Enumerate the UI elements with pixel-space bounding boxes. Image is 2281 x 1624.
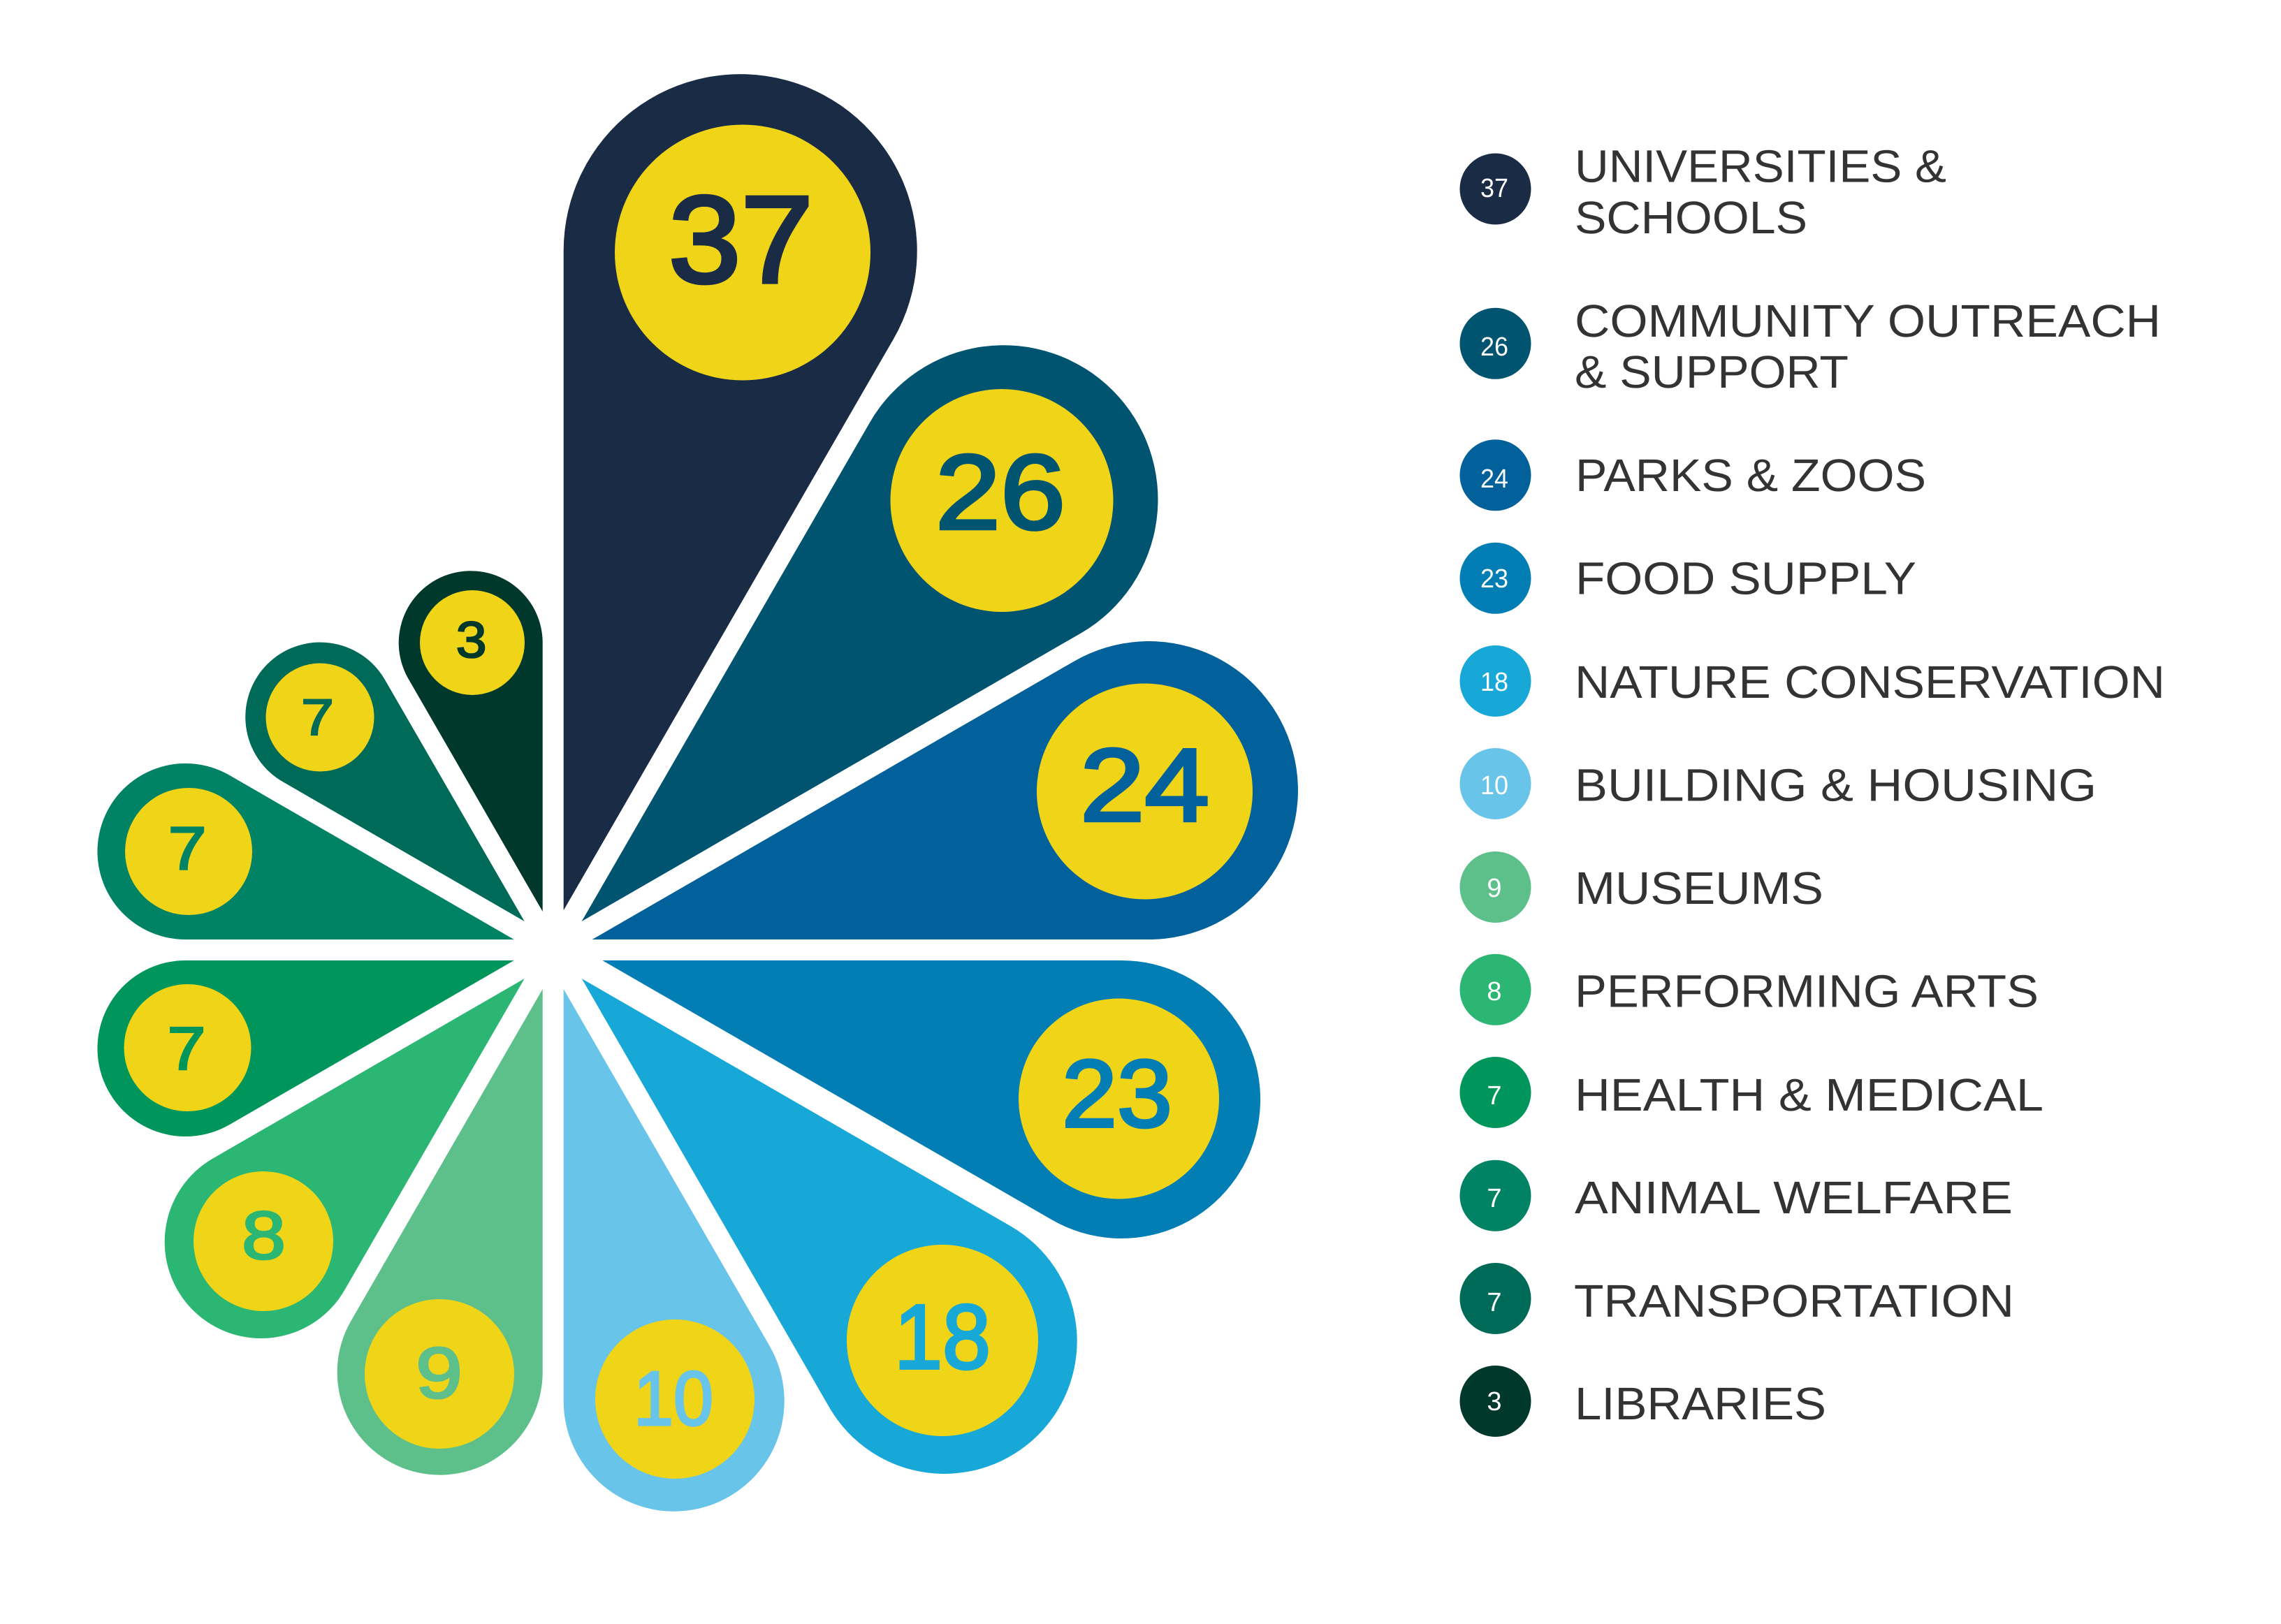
petal: building and housing 10: 10 (634, 1356, 713, 1442)
legend item: museums: MUSEUMS (1575, 863, 1823, 914)
petal: community outreach and support 26: 26 (935, 433, 1065, 552)
petal: parks and zoos 24 (592, 641, 1298, 939)
legend item: food supply: FOOD SUPPLY (1575, 553, 1916, 603)
petal: libraries 3 (399, 571, 543, 912)
legend item: universities and schools: SCHOOLS (1575, 192, 1807, 243)
flower chart (97, 74, 1298, 1512)
legend item: libraries (1460, 1366, 1826, 1437)
legend item: community outreach and support: & SUPPORT (1575, 346, 1849, 397)
legend item: museums: 9 (1487, 874, 1502, 903)
legend item: libraries: 3 (1487, 1387, 1502, 1417)
petal: universities and schools 37: 37 (669, 170, 813, 309)
petal: transportation 7: 7 (301, 689, 334, 746)
legend item: health and medical: HEALTH & MEDICAL (1575, 1069, 2043, 1120)
legend item: universities and schools: 37 (1480, 174, 1508, 203)
legend item: nature conservation: 18 (1480, 668, 1508, 697)
legend item: animal welfare: ANIMAL WELFARE (1575, 1172, 2013, 1223)
legend item: libraries: LIBRARIES (1575, 1378, 1826, 1429)
legend item: universities and schools (1460, 140, 1946, 243)
petal: health and medical 7: 7 (168, 1015, 205, 1083)
legend item: performing arts (1460, 954, 2039, 1025)
petal: parks and zoos 24: 24 (1080, 728, 1209, 843)
legend item: building and housing: BUILDING & HOUSING (1575, 760, 2097, 810)
petal: nature conservation 18: 18 (894, 1285, 991, 1388)
legend item: performing arts: 8 (1487, 977, 1502, 1007)
legend item: transportation: 7 (1487, 1288, 1502, 1317)
legend (1460, 140, 2165, 1437)
petal: transportation 7 (245, 643, 525, 921)
legend item: animal welfare: 7 (1487, 1184, 1502, 1213)
legend item: health and medical (1460, 1057, 2043, 1128)
legend item: parks and zoos: PARKS & ZOOS (1575, 450, 1926, 501)
legend item: building and housing: 10 (1480, 771, 1508, 800)
petal: animal welfare 7: 7 (168, 815, 207, 883)
legend item: nature conservation: NATURE CONSERVATION (1575, 657, 2165, 708)
petal: health and medical 7 (97, 960, 514, 1136)
petal: food supply 23 (602, 960, 1260, 1238)
legend item: animal welfare (1460, 1160, 2013, 1231)
petal: museums 9: 9 (416, 1333, 462, 1413)
petal: nature conservation 18 (582, 979, 1077, 1474)
legend item: museums (1460, 851, 1823, 923)
legend item: building and housing (1460, 748, 2097, 819)
legend item: community outreach and support: COMMUNITY OUTREACH (1575, 295, 2161, 346)
petal: universities and schools 37 (564, 74, 917, 910)
petal: community outreach and support 26 (582, 345, 1158, 921)
legend item: food supply (1460, 543, 1916, 614)
legend item: universities and schools: UNIVERSITIES & (1575, 140, 1946, 191)
legend item: nature conservation (1460, 645, 2165, 717)
legend item: transportation (1460, 1263, 2014, 1334)
petal: food supply 23: 23 (1062, 1041, 1172, 1148)
petal: libraries 3: 3 (456, 612, 487, 668)
legend item: health and medical: 7 (1487, 1081, 1502, 1111)
petal: performing arts 8 (165, 979, 525, 1338)
petal: performing arts 8: 8 (242, 1197, 286, 1273)
legend item: performing arts: PERFORMING ARTS (1575, 965, 2039, 1017)
petal: building and housing 10 (564, 989, 785, 1512)
legend item: community outreach and support: 26 (1480, 332, 1508, 362)
petal: animal welfare 7 (97, 763, 514, 939)
petal: museums 9 (337, 989, 543, 1475)
legend item: transportation: TRANSPORTATION (1574, 1275, 2014, 1326)
legend item: parks and zoos (1460, 439, 1926, 511)
legend item: food supply: 23 (1480, 564, 1508, 594)
legend item: parks and zoos: 24 (1480, 464, 1508, 494)
legend item: community outreach and support (1460, 295, 2161, 397)
